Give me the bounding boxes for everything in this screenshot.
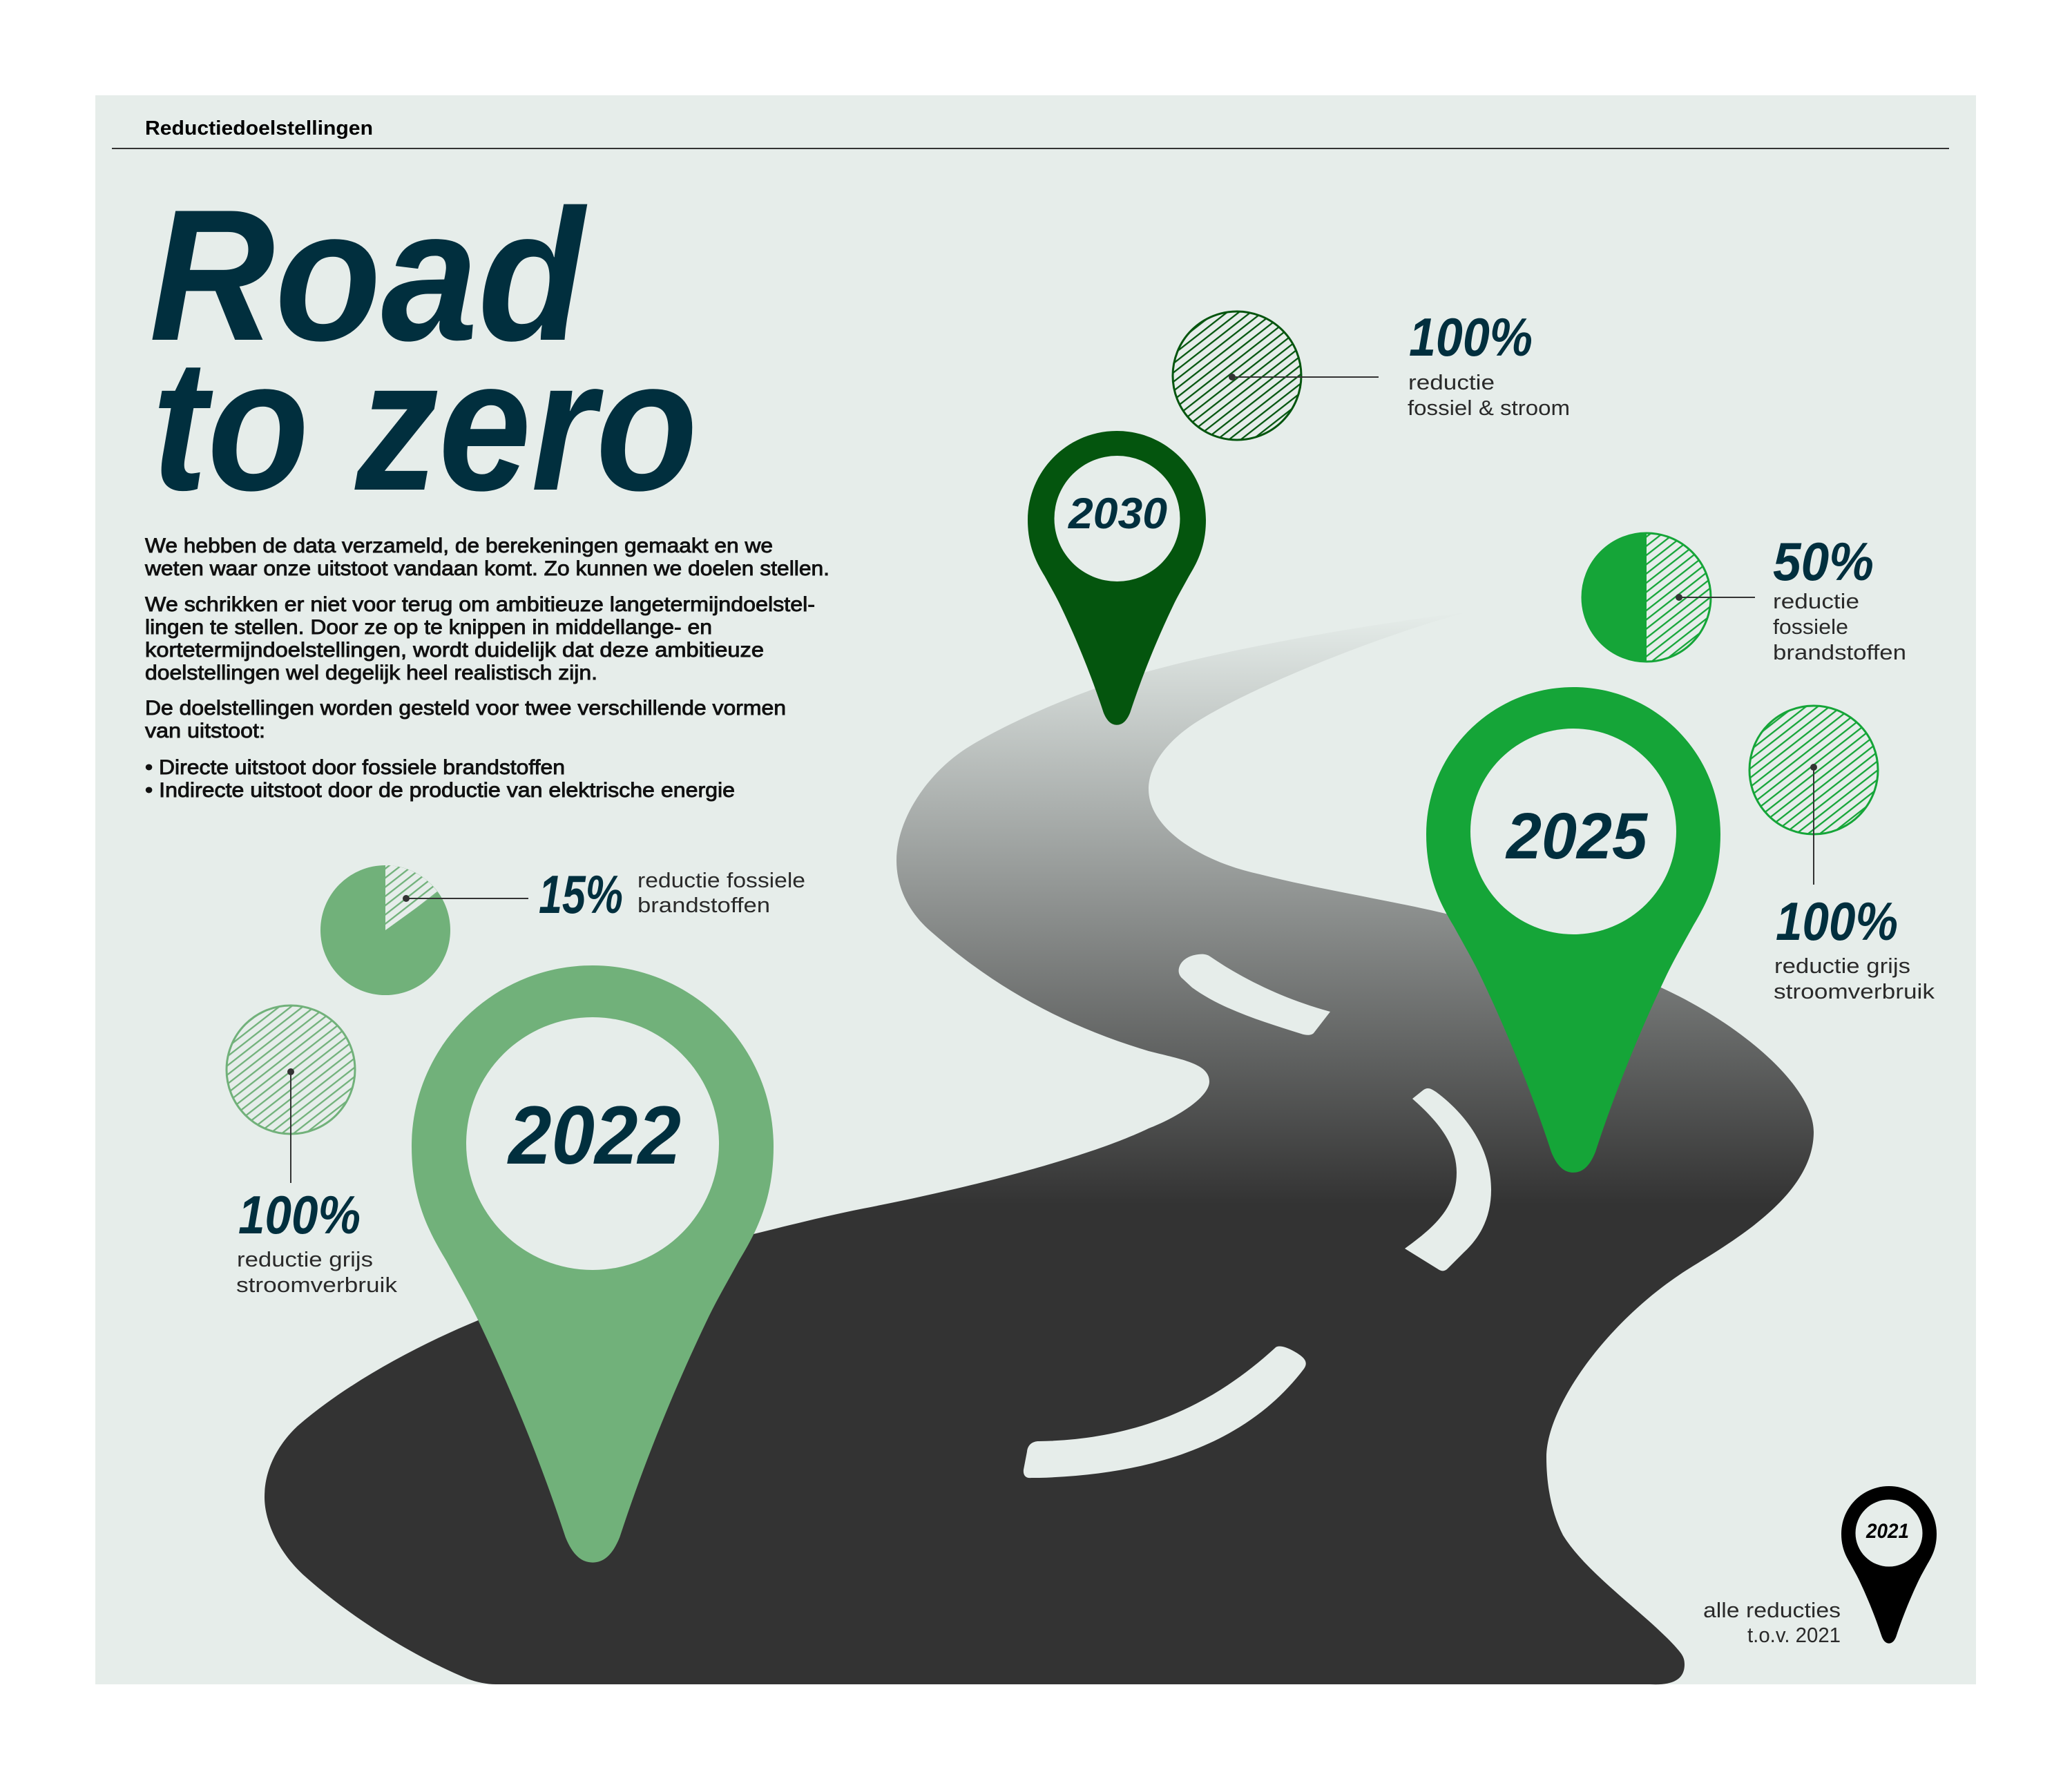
label: reductie grijs stroomverbruik 2025: reductie grijs xyxy=(1774,954,1910,978)
road lane marking: middle xyxy=(1405,1088,1491,1271)
label: reductie grijs stroomverbruik 2025: stroomverbruik xyxy=(1774,979,1935,1003)
pin: 2025: 2025 xyxy=(1505,800,1648,873)
label: reductie fossiele brandstoffen 2025: brandstoffen xyxy=(1773,640,1906,664)
label: reductie grijs stroomverbruik 2022: stroomverbruik xyxy=(236,1273,398,1297)
label: reductie fossiele brandstoffen xyxy=(637,868,805,917)
label: alle reducties t.o.v. 2021: t.o.v. 2021 xyxy=(1747,1623,1841,1647)
intro text block: We schrikken er niet voor terug om ambitieuze langetermijndoelstel- xyxy=(145,593,815,616)
pin: 2021 legend xyxy=(1841,1486,1937,1644)
pin: 2021 legend: 2021 xyxy=(1865,1520,1909,1543)
pie: 100% grey electricity reduction 2025 xyxy=(1749,706,1878,885)
label: reductie fossiel & stroom xyxy=(1408,370,1570,420)
intro text block: kortetermijndoelstellingen, wordt duidelijk dat deze ambitieuze xyxy=(145,639,764,662)
stat: 100% 2030: 100% xyxy=(1409,307,1533,367)
intro text block: We hebben de data verzameld, de berekeningen gemaakt en we xyxy=(145,535,773,557)
label: alle reducties t.o.v. 2021: alle reducties xyxy=(1703,1598,1841,1622)
stat: 15%: 15% xyxy=(539,864,623,925)
label: reductie fossiele brandstoffen 2025: reductie xyxy=(1773,589,1859,613)
intro text block: • Indirecte uitstoot door de productie van elektrische energie xyxy=(145,779,735,802)
stat: 100% 2025: 100% xyxy=(1776,891,1898,952)
intro text block: • Directe uitstoot door fossiele brandstoffen xyxy=(145,756,565,779)
pie: 100% reduction 2030 xyxy=(1173,311,1379,440)
label: alle reducties t.o.v. 2021 xyxy=(1703,1598,1841,1647)
title xyxy=(149,171,698,530)
pie: 50% fossil reduction 2025 xyxy=(1582,532,1755,662)
pin: 2022: 2022 xyxy=(507,1089,681,1182)
label: reductie fossiele brandstoffen: brandstoffen xyxy=(637,893,770,917)
title: to zero xyxy=(152,321,698,530)
section label: Reductiedoelstellingen xyxy=(145,117,373,139)
label: reductie fossiel & stroom: reductie xyxy=(1408,370,1495,394)
pie: 100% grey electricity reduction 2022 xyxy=(227,1005,355,1183)
road xyxy=(265,612,1814,1684)
pin: 2025 xyxy=(1426,687,1720,1173)
label: reductie fossiele brandstoffen 2025: fossiele xyxy=(1773,615,1848,639)
title: Road xyxy=(149,171,590,380)
pie: 15% fossil reduction 2022 xyxy=(320,865,528,995)
intro text block: van uitstoot: xyxy=(145,720,265,742)
pin: 2022 xyxy=(412,965,774,1563)
intro text block: lingen te stellen. Door ze op te knippen in middellange- en xyxy=(145,616,712,639)
label: reductie grijs stroomverbruik 2022 xyxy=(236,1247,398,1297)
label: reductie fossiele brandstoffen 2025 xyxy=(1773,589,1906,664)
label: reductie fossiele brandstoffen: reductie fossiele xyxy=(637,868,805,892)
stat: 100% 2022: 100% xyxy=(238,1184,361,1245)
intro text block xyxy=(144,535,829,802)
intro text block: De doelstellingen worden gesteld voor twee verschillende vormen xyxy=(145,697,786,720)
intro text block: doelstellingen wel degelijk heel realistisch zijn. xyxy=(145,662,597,684)
road lane marking: upper xyxy=(1179,954,1330,1035)
pin: 2030: 2030 xyxy=(1068,490,1167,538)
pin: 2030 xyxy=(1028,431,1206,725)
road lane marking: lower xyxy=(1024,1347,1306,1478)
label: reductie fossiel & stroom: fossiel & stroom xyxy=(1408,396,1570,420)
stat: 50%: 50% xyxy=(1773,531,1874,592)
intro text block: weten waar onze uitstoot vandaan komt. Zo kunnen we doelen stellen. xyxy=(144,557,829,580)
label: reductie grijs stroomverbruik 2022: reductie grijs xyxy=(237,1247,373,1271)
label: reductie grijs stroomverbruik 2025 xyxy=(1774,954,1935,1003)
